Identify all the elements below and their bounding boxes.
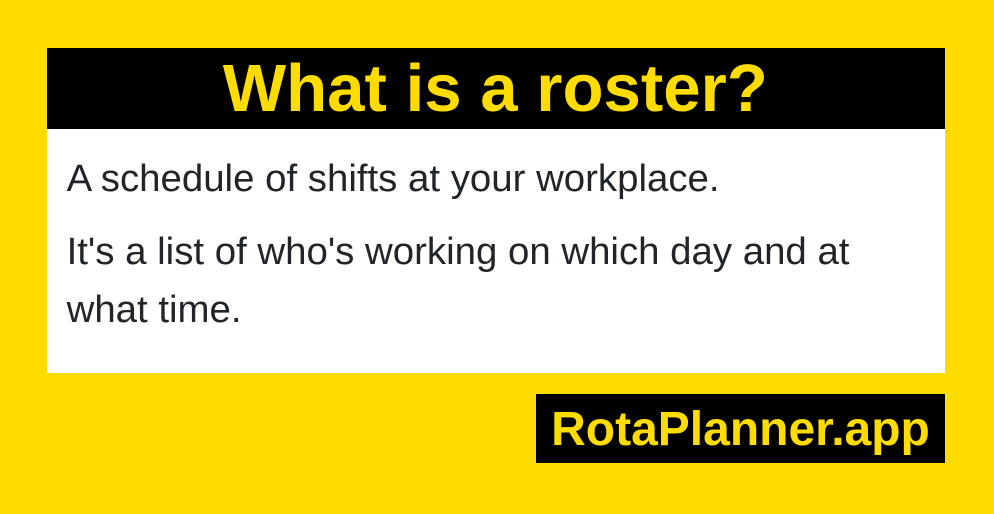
brand badge: RotaPlanner.app bbox=[551, 403, 930, 456]
title banner bbox=[47, 48, 945, 129]
text: second paragraph: It's a list of who's working on which day and at bbox=[67, 230, 849, 273]
title banner: What is a roster? bbox=[223, 51, 768, 126]
text: second paragraph bbox=[66, 230, 850, 331]
text: first paragraph: A schedule of shifts at your workplace. bbox=[67, 157, 720, 200]
text: second paragraph: what time. bbox=[67, 288, 242, 331]
panel: definition text bbox=[47, 129, 945, 373]
